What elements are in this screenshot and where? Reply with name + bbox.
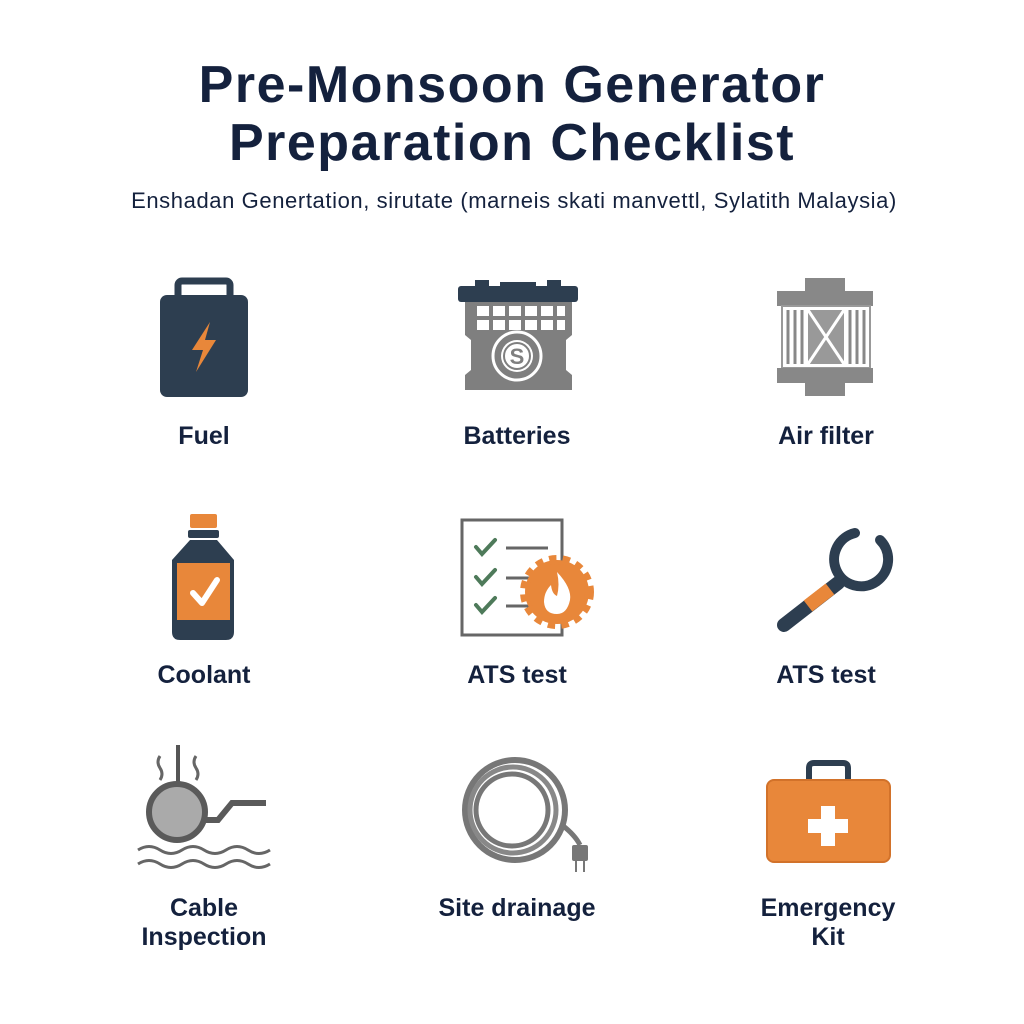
title: Preparation Checklist bbox=[229, 114, 795, 172]
label: site drainage: Site drainage bbox=[438, 894, 596, 922]
label: emergency kit bbox=[761, 894, 895, 951]
icon: emergency kit bbox=[767, 763, 890, 862]
icon: air filter bbox=[777, 278, 873, 396]
label: cable inspection: Inspection bbox=[141, 923, 267, 951]
label: emergency kit: Kit bbox=[811, 923, 845, 951]
label: air filter: Air filter bbox=[778, 422, 874, 450]
label: cable inspection bbox=[141, 894, 267, 951]
label: coolant: Coolant bbox=[157, 661, 251, 689]
label: batteries: Batteries bbox=[464, 422, 570, 450]
icon: coolant bbox=[172, 514, 234, 640]
icon: fuel bbox=[160, 281, 248, 397]
subtitle: Enshadan Genertation, sirutate (marneis skati manvettl, Sylatith Malaysia) bbox=[131, 188, 897, 213]
label: cable inspection: Cable bbox=[170, 894, 238, 922]
title: Pre-Monsoon Generator bbox=[199, 56, 825, 114]
icon: wrench bbox=[784, 533, 888, 625]
label: fuel: Fuel bbox=[178, 422, 230, 450]
label: ATS test: ATS test bbox=[467, 661, 567, 689]
icon: site drainage cable coil bbox=[465, 760, 588, 872]
icon: ATS test checklist bbox=[462, 520, 589, 635]
icon: cable inspection bbox=[138, 745, 270, 868]
label: ATS test 2: ATS test bbox=[776, 661, 876, 689]
title bbox=[199, 56, 825, 172]
icon: batteries bbox=[458, 280, 578, 390]
label: emergency kit: Emergency bbox=[761, 894, 895, 922]
icon: batteries: S bbox=[510, 344, 524, 369]
